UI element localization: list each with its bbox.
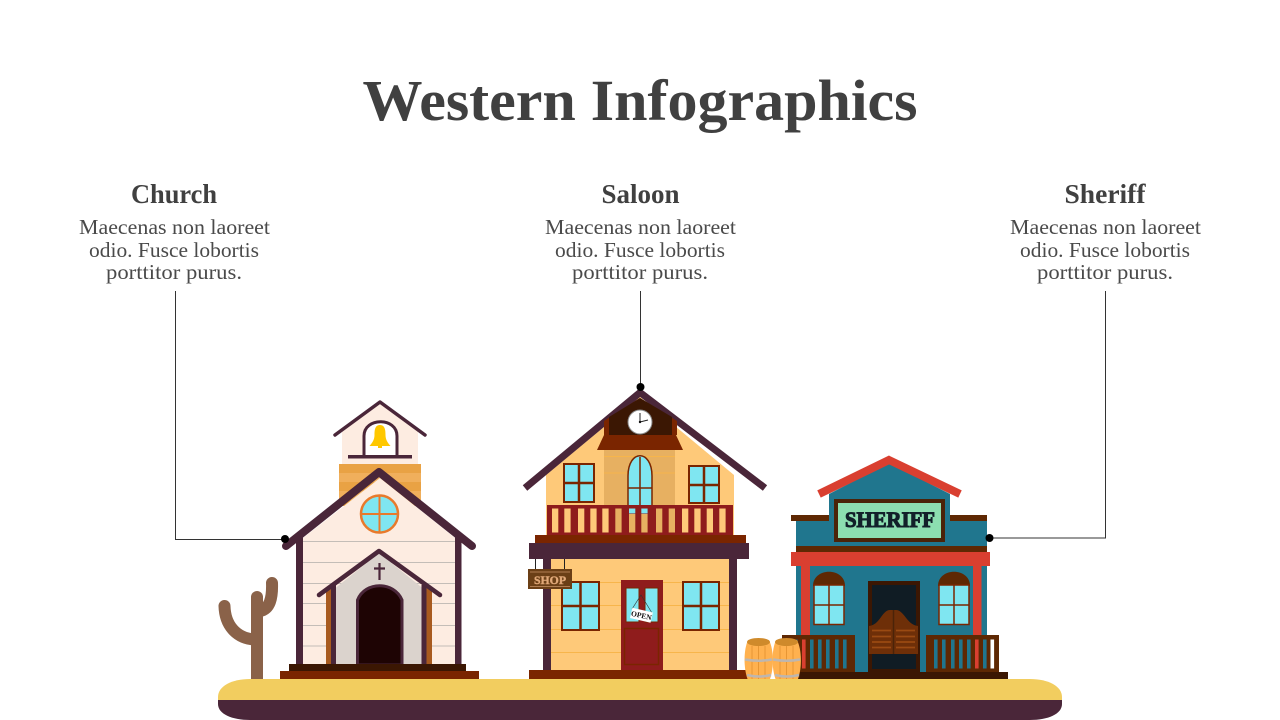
text block: Saloon: Maecenas non laoreet <box>545 215 736 239</box>
saloon gable <box>597 398 683 450</box>
sheriff porch roof <box>791 546 990 673</box>
text block: Sheriff <box>1010 179 1201 284</box>
building: church <box>280 402 479 679</box>
left railing <box>782 635 855 672</box>
sheriff roof <box>819 460 960 494</box>
church porch <box>319 551 440 665</box>
icon: cactus <box>224 583 272 680</box>
title: Western Infographics <box>362 68 918 133</box>
icon: bell <box>370 425 390 448</box>
text block: Church: Church <box>131 179 217 209</box>
text block: Saloon: porttitor purus. <box>572 260 708 284</box>
saloon eave <box>529 535 749 559</box>
saloon roof <box>525 392 765 488</box>
building: sheriff <box>782 460 1008 679</box>
church door <box>358 586 402 665</box>
icon: right barrel <box>773 638 801 679</box>
round window <box>361 496 398 532</box>
icon: clock <box>628 410 652 434</box>
text block: Sheriff: Sheriff <box>1064 179 1147 209</box>
sheriff left window <box>813 572 845 625</box>
text block: Church: Maecenas non laoreet <box>79 215 270 239</box>
open sign: OPEN <box>630 609 653 622</box>
sheriff right window <box>938 572 970 625</box>
shop sign <box>528 559 572 589</box>
sheriff door <box>868 581 920 673</box>
building: saloon <box>525 392 765 679</box>
church tower <box>335 402 425 506</box>
text block: Saloon: Saloon <box>602 179 680 209</box>
church body <box>286 472 472 665</box>
open sign <box>630 595 653 623</box>
sheriff upper facade <box>791 463 987 552</box>
saloon door <box>621 580 663 670</box>
sheriff sign <box>836 501 943 540</box>
leader line: Church <box>176 291 289 543</box>
text block: Church: porttitor purus. <box>106 260 242 284</box>
sheriff base <box>790 672 1008 679</box>
right railing <box>926 635 999 672</box>
upper windows <box>564 456 719 516</box>
text block: Church <box>79 179 270 284</box>
lower windows <box>562 582 719 630</box>
text block: Sheriff: porttitor purus. <box>1037 260 1173 284</box>
text block: Church: odio. Fusce lobortis <box>89 238 259 262</box>
text block: Saloon: odio. Fusce lobortis <box>555 238 725 262</box>
icon: left barrel <box>745 638 773 679</box>
text block: Sheriff: Maecenas non laoreet <box>1010 215 1201 239</box>
church steps <box>280 664 479 679</box>
icon: cross <box>374 563 385 580</box>
leader line: Sheriff <box>986 291 1106 542</box>
ground <box>218 679 1062 720</box>
text block: Sheriff: odio. Fusce lobortis <box>1020 238 1190 262</box>
leader line: Saloon <box>636 291 644 391</box>
saloon upper floor <box>546 397 734 536</box>
saloon base <box>529 670 748 679</box>
balcony railing <box>547 505 733 535</box>
saloon lower floor <box>543 559 737 671</box>
text block: Saloon <box>545 179 736 284</box>
shop sign: SHOP <box>534 575 566 587</box>
sheriff sign: SHERIFF <box>845 507 935 532</box>
